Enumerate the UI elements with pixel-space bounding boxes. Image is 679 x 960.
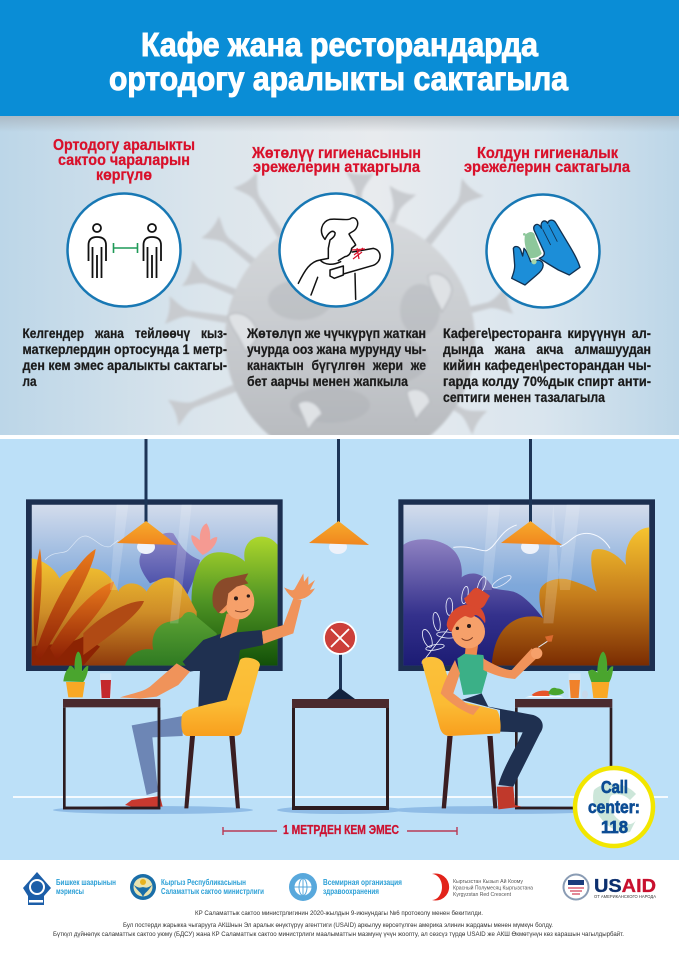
icon: two people at a distance (68, 194, 180, 306)
text block 2: канактын бүгүлгөн жери же (247, 357, 426, 373)
footer notes: Бул постерди жарыкка чыгарууга АКШнын Эл аралык өнүктүрүү агенттиги (USAID) аркылуу көрсөтүлгөн америка элинин жардамы менен мүмкүн болду. (123, 921, 553, 929)
logo: Kyrgyz Ministry of Health (130, 874, 264, 900)
footer notes: Бүткүл дүйнөлүк саламаттык сактоо уюму (БДСУ) жана КР Саламаттык сактоо министрлиги маалыматтын мазмунү үчүн жоопту, ал сөзсүз түрдө USAID же АКШ Өкмөтүнүн көз карашын чагылдырбайт. (53, 930, 624, 938)
icon: man coughing into elbow (280, 194, 392, 306)
text block 1: Келгендер жана тейлөөчү кыз- (22, 325, 227, 341)
logo: USAID: ОТ АМЕРИКАНСКОГО НАРОДА (594, 894, 657, 900)
logo: Red Crescent: Красный Полумесяц Кыргызстана (453, 884, 534, 892)
heading 1: көргүлө (96, 167, 152, 184)
heading 1: Ортодогу аралыкты (53, 137, 195, 154)
text block 3: дында жана акча алмашуудан (443, 341, 651, 357)
call center text: Call (601, 777, 628, 797)
logo: Kyrgyz Ministry of Health: Саламаттык сактоо министрлиги (161, 886, 264, 896)
drink and food (525, 673, 588, 698)
heading 1 (53, 137, 195, 184)
text block 1: ден кем эмес аралыкты сактагы- (22, 357, 227, 373)
lamp right (501, 439, 562, 554)
heading 2: Жөтөлүү гигиенасынын (251, 145, 421, 162)
logo: USAID: USAID (594, 876, 656, 896)
logo: Bishkek (23, 872, 116, 905)
text block 2 (246, 325, 426, 389)
logo: WHO: здравоохранения (323, 886, 379, 896)
call center text: 118 (601, 817, 628, 837)
call center badge (575, 768, 653, 846)
lamp left (117, 439, 177, 554)
lamp centre (309, 439, 369, 554)
logo: WHO (289, 873, 402, 901)
call center text (588, 777, 640, 837)
logo: Red Crescent: Kyrgyzstan Red Crescent (453, 892, 511, 898)
logo: Red Crescent (432, 874, 534, 900)
title: ортодогу аралыкты сактагыла (109, 60, 569, 97)
heading 2: эрежелерин аткаргыла (253, 159, 420, 176)
text block 2: бет аарчы менен жапкыла (247, 373, 408, 389)
column 3: hand hygiene (443, 145, 651, 405)
heading 1: сактоо чараларын (58, 152, 190, 169)
logo: Kyrgyz Ministry of Health: Кыргыз Республикасынын (161, 877, 246, 887)
heading 2 (251, 145, 421, 176)
call center text: center: (588, 797, 640, 817)
icon: faint telephone (593, 784, 636, 832)
floor shadows (53, 806, 610, 814)
plant (63, 652, 88, 697)
footer notes: КР Саламаттык сактоо министрлигинин 2020-жылдын 9-июнундагы №6 протоколу менен бекитилди. (195, 909, 483, 917)
centre table with prohibition sign (292, 622, 389, 810)
table left (63, 699, 160, 809)
text block 1 (22, 325, 227, 389)
logo: Bishkek: Бишкек шаарынын (56, 877, 116, 887)
text block 3 (443, 325, 651, 405)
text block 2: Жөтөлүп же чүчкүрүп жаткан (246, 325, 426, 341)
distance label: 1 МЕТРДЕН КЕМ ЭМЕС (283, 823, 399, 837)
text block 3: Кафеге\ресторанга кирүүнүн ал- (443, 325, 651, 341)
logo: WHO: Всемирная организация (323, 877, 402, 887)
text block 3: кийин кафеден\ресторандан чы- (443, 357, 651, 373)
text block 3: гарда колду 70%дык спирт анти- (443, 373, 651, 389)
heading 3 (464, 145, 630, 176)
footer (23, 872, 657, 938)
no-entry sign (324, 622, 356, 699)
title: Кафе жана ресторандарда (141, 26, 539, 63)
heading 3: Колдун гигиеналык (477, 145, 618, 162)
distance measure (223, 823, 457, 837)
floor line (13, 796, 668, 798)
title (109, 26, 569, 97)
footer notes (53, 909, 624, 938)
man at left table (63, 573, 315, 809)
logo: Red Crescent: Кыргызстан Кызыл Ай Коому (453, 878, 523, 885)
panel: cafe scene (0, 439, 679, 860)
logo: Bishkek: мэриясы (56, 886, 84, 896)
plant right (588, 652, 613, 698)
woman at right table (422, 588, 613, 809)
table right (515, 699, 612, 809)
icon: gloved hands with sanitizer (486, 194, 600, 308)
text block 3: септиги менен тазалагыла (443, 389, 605, 405)
column 1: physical distance (22, 137, 227, 389)
column 2: cough hygiene (246, 145, 426, 389)
heading 3: эрежелерин сактагыла (464, 159, 630, 176)
text block 2: учурда ооз жана мурунду чы- (247, 341, 426, 357)
header band (0, 0, 679, 116)
right window (398, 499, 655, 671)
text block 1: ла (22, 373, 37, 389)
logo: USAID (564, 874, 657, 900)
panel: hygiene rules (0, 116, 679, 465)
text block 1: маткерлердин ортосунда 1 метр- (22, 341, 227, 357)
virus illustration (165, 172, 513, 435)
left window (26, 499, 283, 671)
lamps (117, 439, 562, 554)
centre table (292, 699, 389, 810)
drink (100, 673, 111, 698)
